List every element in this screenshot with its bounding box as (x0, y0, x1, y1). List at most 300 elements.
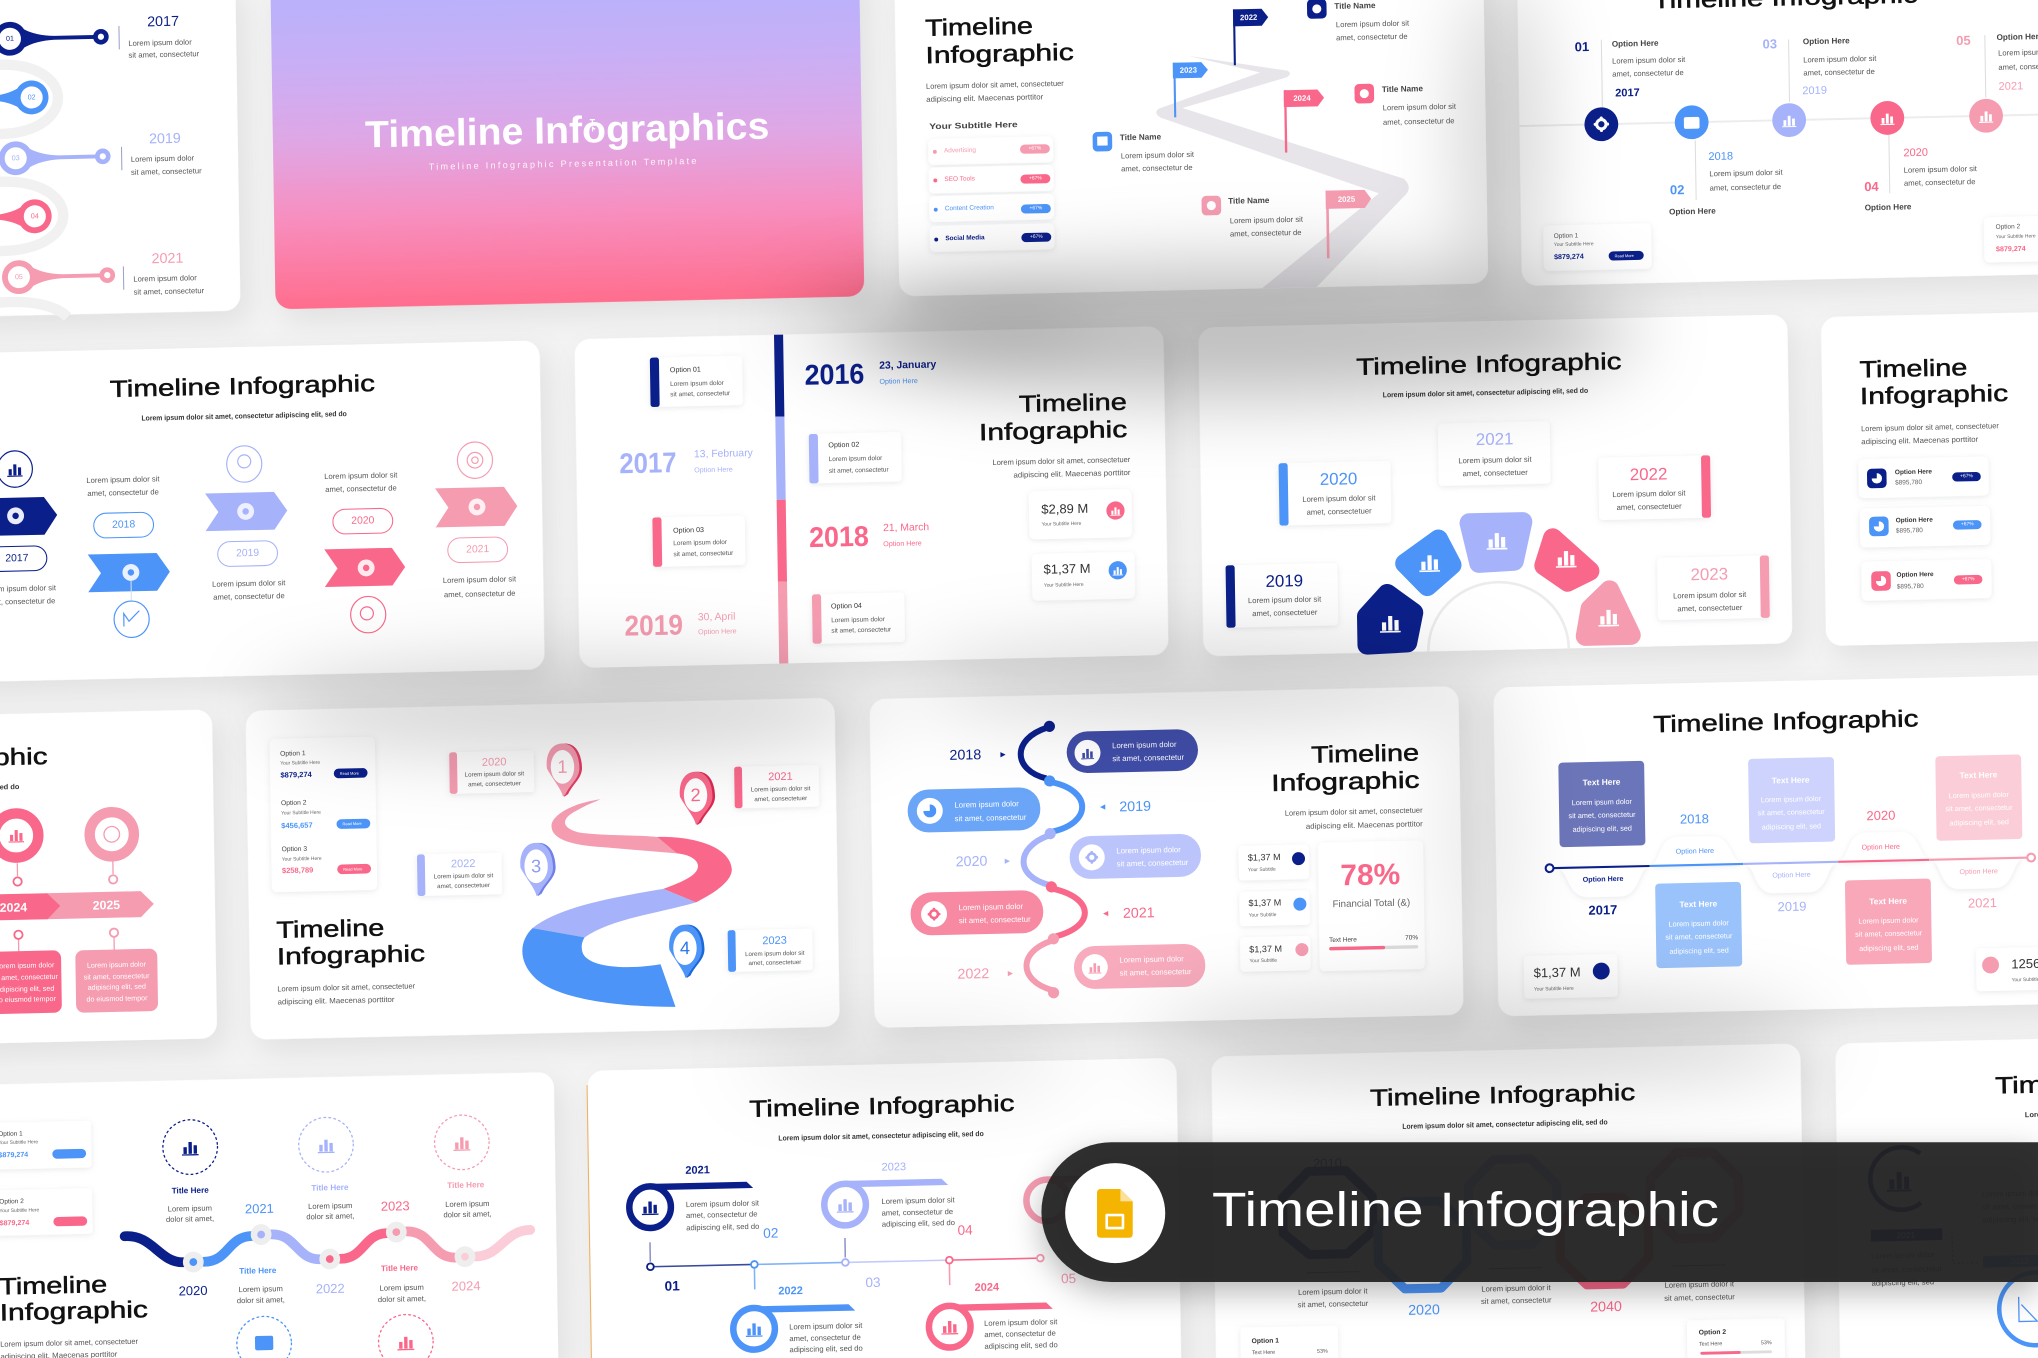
node 2024: 2024 (974, 1282, 1000, 1294)
options list card: Your Subtitle Here (281, 810, 321, 817)
tab labels: Option Here (1772, 871, 1811, 880)
item: title name bottom: Title Name (1228, 196, 1270, 206)
box three: sit amet, consectetur (1945, 803, 2013, 813)
heading: Infographic (0, 1296, 148, 1325)
option 1 card: Your Subtitle Here (1554, 241, 1594, 248)
descriptions: amet, consectetur de (444, 589, 516, 599)
intro paragraph: adipiscing elit. Maecenas porttitor (1861, 435, 1979, 446)
heading: Infographic (925, 39, 1074, 68)
axis (1546, 854, 2035, 872)
heading (1271, 739, 1420, 796)
options list card: Read More (340, 771, 359, 776)
road (1155, 51, 1410, 291)
financial total card (1318, 840, 1425, 971)
option 2 card (0, 1188, 93, 1236)
card 2023: amet, consectetuer (1677, 603, 1743, 613)
title labels (172, 1180, 486, 1278)
years: 2040 (1590, 1299, 1622, 1316)
label 2023 (728, 928, 813, 972)
heading: Timeline (925, 13, 1033, 41)
year pills: 2019 (236, 548, 259, 559)
options list card: Option 3 (282, 846, 307, 853)
year 2021 text: sit amet, consectetur (133, 286, 205, 297)
options list card: Option 1 (280, 750, 306, 758)
heading (1859, 353, 2009, 409)
option labels: Option Here (1669, 207, 1716, 217)
node 2023: 2023 (881, 1161, 906, 1174)
option 01 card: sit amet, consectetur (670, 390, 731, 398)
box one (1558, 761, 1645, 847)
octagon chain (1282, 1151, 1740, 1292)
arc descriptions: sit amet, consectetur (1871, 1264, 1942, 1275)
value card two: Your Subtitle Here (1044, 582, 1084, 589)
heading: Timeline Infographic (1356, 348, 1622, 380)
descriptions: Lorem ipsum dolor sit (324, 470, 398, 481)
year 2017 text: sit amet, consectetur (128, 49, 200, 60)
years: 2023 (381, 1198, 410, 1214)
pill periwinkle (1069, 834, 1201, 879)
descriptions: amet, consectetur de (1710, 182, 1781, 193)
label 2021 (734, 765, 819, 808)
intro paragraph: adipiscing elit. Maecenas porttitor (1306, 819, 1423, 831)
node 2023 (824, 1160, 956, 1230)
small value cards: $1,37 M (1248, 852, 1281, 863)
box 2025: Lorem ipsum dolor (87, 960, 147, 970)
number labels: 03 (1762, 36, 1777, 51)
list of channels: +67% (1028, 145, 1042, 152)
list of channels: +67% (1029, 175, 1042, 182)
number labels: 01 (1575, 39, 1589, 54)
chevron 2021 (435, 487, 518, 527)
subheading: Lorem ipsum dolor sit amet, consectetur adipiscing elit, sed do (141, 409, 347, 423)
option 01 card: Lorem ipsum dolor (670, 380, 725, 388)
option 04 card: Lorem ipsum dolor (831, 616, 886, 624)
card 2022: Lorem ipsum dolor sit (1612, 488, 1686, 499)
years: 2021 (1123, 905, 1155, 922)
year 2018: Option Here (883, 539, 922, 548)
card 2021: 2021 (1476, 429, 1514, 449)
subtitle: Your Subtitle Here (929, 120, 1018, 131)
panel: S road pins slide (246, 698, 840, 1040)
arrow 2024: 2024 (0, 900, 27, 915)
year 2017: 13, February (694, 448, 754, 460)
descriptions: Lorem ipsum dolor sit (1709, 168, 1784, 178)
row two: Option Here (1896, 517, 1933, 524)
descriptions (166, 1197, 493, 1309)
subheading: Lorem ipsum dolor sit amet, consectetur adipiscing elit, sed do (778, 1129, 984, 1143)
pill blue: Lorem ipsum dolor (954, 799, 1019, 810)
label 2022 (417, 853, 502, 896)
option 1 card: $879,274 (1554, 253, 1584, 261)
panel: circle timeline slide (1517, 0, 2038, 286)
label 2021: amet, consectetuer (754, 795, 807, 803)
box four: Text Here (1679, 898, 1718, 909)
options list card: Your Subtitle Here (282, 856, 322, 863)
row two: $895,780 (1896, 527, 1923, 535)
title labels: Title Here (381, 1263, 419, 1273)
chevron 2017 (0, 497, 57, 537)
descriptions: sit amet, consectetur (1481, 1295, 1552, 1306)
box two (1748, 757, 1835, 843)
node 2024: amet, consectetur de (984, 1329, 1056, 1339)
years: 2021 (245, 1201, 274, 1216)
tab labels: Option Here (1959, 867, 1998, 876)
card 2020: Lorem ipsum dolor sit (1302, 493, 1376, 504)
box one: Text Here (1583, 777, 1621, 787)
option 1 card (1240, 1325, 1339, 1358)
descriptions: amet, consectetur de (1904, 177, 1975, 188)
heading: Infographic (277, 940, 426, 970)
subheading: Lorem ipsum dolor sit amet, consectetur adipiscing elit, sed do (1383, 386, 1589, 399)
dashed icon circles (162, 1113, 493, 1358)
years: 2020 (1408, 1302, 1440, 1319)
flag 2025 (1326, 190, 1372, 258)
card 2023: 2023 (1690, 564, 1728, 584)
tab labels: Option Here (1583, 875, 1624, 884)
descriptions (0, 467, 517, 609)
pill pink: Lorem ipsum dolor (1119, 954, 1184, 965)
hidden years: 2050 (1678, 1147, 1707, 1163)
flag 2022 (1233, 9, 1269, 65)
option 2 card: Your Subtitle Here (0, 1207, 39, 1214)
road ribbon (0, 63, 68, 319)
years: 2021 (1968, 895, 1997, 911)
panel: winding pins slide (0, 0, 240, 326)
option 01 card (650, 356, 743, 407)
years: 2017 (1615, 87, 1640, 100)
pill pink (1074, 944, 1206, 989)
subheading: Lorem ipsum dolor sit amet, consectetur adipiscing elit, sed do (1402, 1117, 1608, 1131)
options list card: Read More (342, 821, 362, 826)
card 2023: Lorem ipsum dolor sit (1673, 590, 1747, 600)
descriptions: dolor sit amet, (237, 1295, 285, 1305)
years: 2020 (956, 854, 988, 870)
options list card: $456,657 (281, 821, 313, 830)
heading: Timeline (276, 914, 385, 943)
node 2023: amet, consectetur de (882, 1207, 953, 1218)
descriptions: Lorem ipsum dolor it (1481, 1283, 1552, 1294)
panel: axis with rings slide (587, 1058, 1181, 1358)
descriptions: Lorem ipsum (380, 1283, 424, 1293)
pin 4: 4 (680, 938, 690, 958)
year pills: 2021 (466, 544, 490, 556)
option 2 card: $879,274 (1996, 245, 2026, 253)
title labels: Title Here (239, 1266, 277, 1276)
item: title name left: amet, consectetur de (1121, 163, 1193, 173)
pill pink: sit amet, consectetur (1120, 967, 1192, 978)
shadow overlay (260, 0, 1820, 1088)
item: title name right: Title Name (1382, 84, 1423, 94)
item: title name right (1354, 82, 1457, 127)
tab labels: Option Here (1676, 847, 1714, 856)
panel: snake timeline slide (870, 686, 1464, 1028)
year 2016 (804, 357, 937, 392)
years: 2019 (1119, 799, 1151, 815)
arc 2021: 2021 (1896, 1230, 1916, 1240)
descriptions: amet, consectetur de (213, 591, 285, 602)
heading (925, 12, 1074, 68)
option 1 card: 53% (1317, 1349, 1328, 1355)
S road (520, 796, 734, 1010)
pill blue (907, 787, 1041, 833)
options list card: $258,789 (282, 865, 313, 875)
panel: option rows slide (1821, 304, 2038, 646)
icon: slides logo (1065, 1163, 1165, 1263)
intro paragraph: Lorem ipsum dolor sit amet, consectetuer (277, 981, 416, 993)
label 2020 (449, 751, 534, 794)
box five: Text Here (1869, 896, 1907, 906)
options list card: $879,274 (280, 770, 313, 780)
year 2018 (809, 519, 930, 554)
label 2022: amet, consectetuer (437, 882, 490, 890)
axis numbers: 03 (865, 1275, 881, 1290)
number labels: 05 (1956, 33, 1971, 48)
year 2019: 30, April (698, 612, 735, 623)
node 2023: adipiscing elit, sed do (882, 1218, 955, 1229)
card 2021: amet, consectetuer (1463, 468, 1528, 478)
card 2019: Lorem ipsum dolor sit (1248, 595, 1322, 605)
hidden years: 2010 (1313, 1155, 1342, 1171)
descriptions: Lorem ipsum dolor it (1665, 1279, 1735, 1290)
hidden years (1313, 1147, 1707, 1171)
value card two (1032, 552, 1135, 601)
row three: +67% (1962, 576, 1975, 582)
pin 1: 1 (557, 757, 568, 777)
intro paragraph (926, 79, 1064, 104)
box 2025: sit amet, consectetur (84, 972, 150, 982)
card 2021: Lorem ipsum dolor sit (1458, 455, 1532, 465)
intro paragraph (277, 981, 416, 1006)
snake line (1020, 720, 1086, 999)
bar 2022 (1983, 1254, 2038, 1268)
arc descriptions (1870, 1188, 2038, 1288)
node 2022: amet, consectetur de (789, 1333, 861, 1343)
years: 2020 (179, 1283, 208, 1298)
label 2023: 2023 (762, 935, 787, 947)
axis numbers: 05 (1061, 1271, 1076, 1286)
circle 2024 (0, 813, 39, 858)
card 2020: 2020 (1320, 469, 1358, 489)
heading: Timeline (1019, 389, 1127, 417)
box one: Lorem ipsum dolor (1572, 797, 1633, 807)
node 2021: 2021 (685, 1164, 710, 1177)
intro paragraph: Lorem ipsum dolor sit amet, consectetuer (992, 455, 1131, 467)
card 2022: amet, consectetuer (1616, 502, 1682, 512)
label 2023: Lorem ipsum dolor sit (745, 950, 805, 958)
pin 03: 03 (12, 154, 20, 162)
year 2019 text (130, 130, 202, 177)
descriptions: Lorem ipsum (445, 1199, 490, 1209)
node 2025 (1026, 1174, 1150, 1222)
list of channels: Social Media (945, 234, 985, 242)
heading: Infographic (1860, 380, 2009, 409)
item: title name bottom: Lorem ipsum dolor sit (1230, 215, 1304, 225)
box five: sit amet, consectetur (1855, 928, 1923, 939)
node 2024: adipiscing elit, sed do (984, 1340, 1058, 1351)
arc descriptions: Lorem ipsum dolor (1871, 1250, 1935, 1260)
box one: adipiscing elit, sed (1572, 824, 1632, 834)
years: 2018 (1680, 811, 1709, 827)
node 2022: adipiscing elit, sed do (789, 1344, 863, 1354)
axis (647, 1234, 1044, 1292)
panel: chevron timeline slide (0, 340, 545, 682)
chevron 2018 (88, 553, 170, 601)
box 2025: adipiscing elit, sed (88, 983, 146, 992)
year 2019 text: sit amet, consectetur (131, 166, 202, 177)
pill periwinkle: sit amet, consectetur (1117, 858, 1189, 868)
pill periwinkle: Lorem ipsum dolor (1116, 845, 1181, 855)
box 2025 (75, 949, 158, 1013)
pin 04: 04 (31, 212, 39, 220)
box two: Text Here (1772, 775, 1810, 785)
row three: Option Here (1896, 571, 1934, 579)
pin 4 (669, 924, 705, 978)
wave line (124, 1218, 531, 1275)
box four: Lorem ipsum dolor (1669, 918, 1729, 929)
year 2016: 23, January (879, 359, 937, 372)
panel: arrow ribbon slide (0, 710, 217, 1051)
item: title name left: Lorem ipsum dolor sit (1121, 150, 1195, 160)
arc 2021 (1869, 1146, 1942, 1242)
item: title name top: Title Name (1334, 1, 1376, 11)
value card one (1029, 489, 1132, 539)
descriptions: Lorem ipsum (308, 1201, 352, 1211)
descriptions: dolor sit amet, (306, 1211, 355, 1221)
option 04 card (812, 592, 905, 644)
box four: adipiscing elit, sed (1669, 946, 1729, 956)
pin 1 (546, 743, 582, 797)
value card two: $1,37 M (1043, 561, 1091, 577)
card 2019 (1226, 563, 1338, 628)
small value cards: Your Subtitle (1248, 867, 1276, 873)
options list card: Your Subtitle Here (280, 760, 320, 767)
heading: Infographic (1271, 767, 1420, 796)
year 2019: Option Here (698, 627, 737, 636)
descriptions: sit amet, consectetur (1664, 1292, 1735, 1303)
small value cards: $1,37 M (1249, 944, 1282, 954)
axis numbers (664, 1219, 1076, 1295)
list of channels: Advertising (944, 147, 976, 155)
heading: Timeline (1859, 354, 1968, 383)
value card one: $2,89 M (1041, 501, 1088, 517)
descriptions: Lorem ipsum dolor it (1298, 1286, 1368, 1297)
option 03 card (652, 515, 745, 567)
title labels: Title Here (447, 1180, 485, 1190)
value card (1524, 954, 1618, 999)
list of channels: +67% (1030, 234, 1043, 240)
box one: sit amet, consectetur (1568, 810, 1636, 820)
pill coral (910, 890, 1044, 936)
option 01 card: Option 01 (670, 366, 701, 374)
intro paragraph: adipiscing elit. Maecenas porttitor (277, 995, 395, 1006)
small value cards: $1,37 M (1248, 897, 1281, 908)
cover title: Timeline Infographics (365, 104, 770, 155)
years: 2019 (1777, 899, 1807, 914)
descriptions: Lorem ipsum dolor sit (1904, 164, 1978, 175)
label 2022: Lorem ipsum dolor sit (434, 872, 493, 880)
year 2017: Option Here (694, 466, 733, 474)
heading: Timeline Infographic (1370, 1079, 1636, 1111)
year 2016: 2016 (804, 358, 865, 392)
list of channels: Content Creation (945, 204, 994, 212)
year 2017: 2017 (619, 447, 677, 480)
years: 2020 (1866, 808, 1895, 823)
number labels (1575, 31, 1973, 201)
panel: gradient cover slide (270, 0, 864, 309)
option 2 card: Option 2 (1996, 223, 2021, 231)
tab labels: Option Here (1862, 843, 1900, 852)
option 2 card (1984, 215, 2038, 263)
row two: +67% (1961, 521, 1974, 527)
chevron 2020 (324, 548, 405, 587)
node 2024: Lorem ipsum dolor sit (984, 1317, 1058, 1328)
pin 3: 3 (531, 856, 541, 876)
item: title name right: amet, consectetur de (1383, 116, 1455, 127)
card 2020 (1279, 461, 1391, 526)
heading: Timeline Infographic (749, 1090, 1015, 1122)
option 03 card: Lorem ipsum dolor (673, 539, 728, 547)
item: title name bottom (1201, 194, 1304, 239)
flag 2023 (1173, 62, 1209, 117)
years: 2019 (1802, 85, 1827, 97)
petal chart (1365, 519, 1631, 645)
pill navy (1066, 729, 1198, 773)
intro paragraph: Lorem ipsum dolor sit amet, consectetuer (1285, 806, 1423, 818)
year 2019 (624, 608, 737, 643)
options list card: Option 2 (281, 800, 307, 807)
row three: $895,780 (1897, 583, 1924, 591)
item: title name top: Lorem ipsum dolor sit (1336, 19, 1410, 29)
pin 01: 01 (6, 35, 14, 43)
financial total card: Text Here (1329, 936, 1357, 944)
label 2020: amet, consectetuer (468, 780, 521, 788)
intro paragraph: adipiscing elit. Maecenas porttitor (1013, 468, 1131, 480)
box three: adipiscing elit, sed (1949, 817, 2009, 827)
arc descriptions: adipiscing elit, sed (1871, 1277, 1934, 1288)
year pills: 2020 (351, 515, 375, 527)
box five: Lorem ipsum dolor (1858, 915, 1919, 926)
descriptions (1612, 46, 2038, 195)
box 2024 (0, 950, 62, 1015)
years: 2017 (1588, 902, 1617, 918)
tabs (1556, 829, 2026, 898)
item: title name top (1307, 0, 1410, 43)
row three (1861, 559, 1992, 601)
pin 02 (0, 80, 49, 115)
descriptions: Lorem ipsum dolor sit (86, 474, 160, 485)
banner (1041, 1142, 2038, 1282)
option labels (1612, 30, 2038, 218)
label 2023: amet, consectetuer (748, 959, 801, 967)
node 2021: amet, consectetur de (686, 1209, 758, 1220)
year 2021 text: Lorem ipsum dolor (133, 273, 197, 284)
axis numbers: 02 (763, 1225, 778, 1241)
option 04 card: Option 04 (831, 602, 862, 611)
heading: Timeline Infographic (1653, 705, 1919, 737)
item: title name bottom: amet, consectetur de (1230, 228, 1302, 238)
card 2023 (1657, 555, 1770, 620)
panel: vertical years slide (574, 326, 1168, 668)
value card: $1,37 M (1534, 964, 1581, 980)
option 1 card: Option 1 (1554, 232, 1579, 240)
year 2021 text (133, 250, 205, 297)
option 1 card: Option 1 (1252, 1338, 1279, 1345)
panel: wave timeline slide (0, 1072, 559, 1358)
list of channels (928, 136, 1055, 252)
year 2018: 2018 (809, 521, 869, 554)
item: title name top: amet, consectetur de (1336, 32, 1408, 42)
pin 03 (0, 139, 111, 176)
